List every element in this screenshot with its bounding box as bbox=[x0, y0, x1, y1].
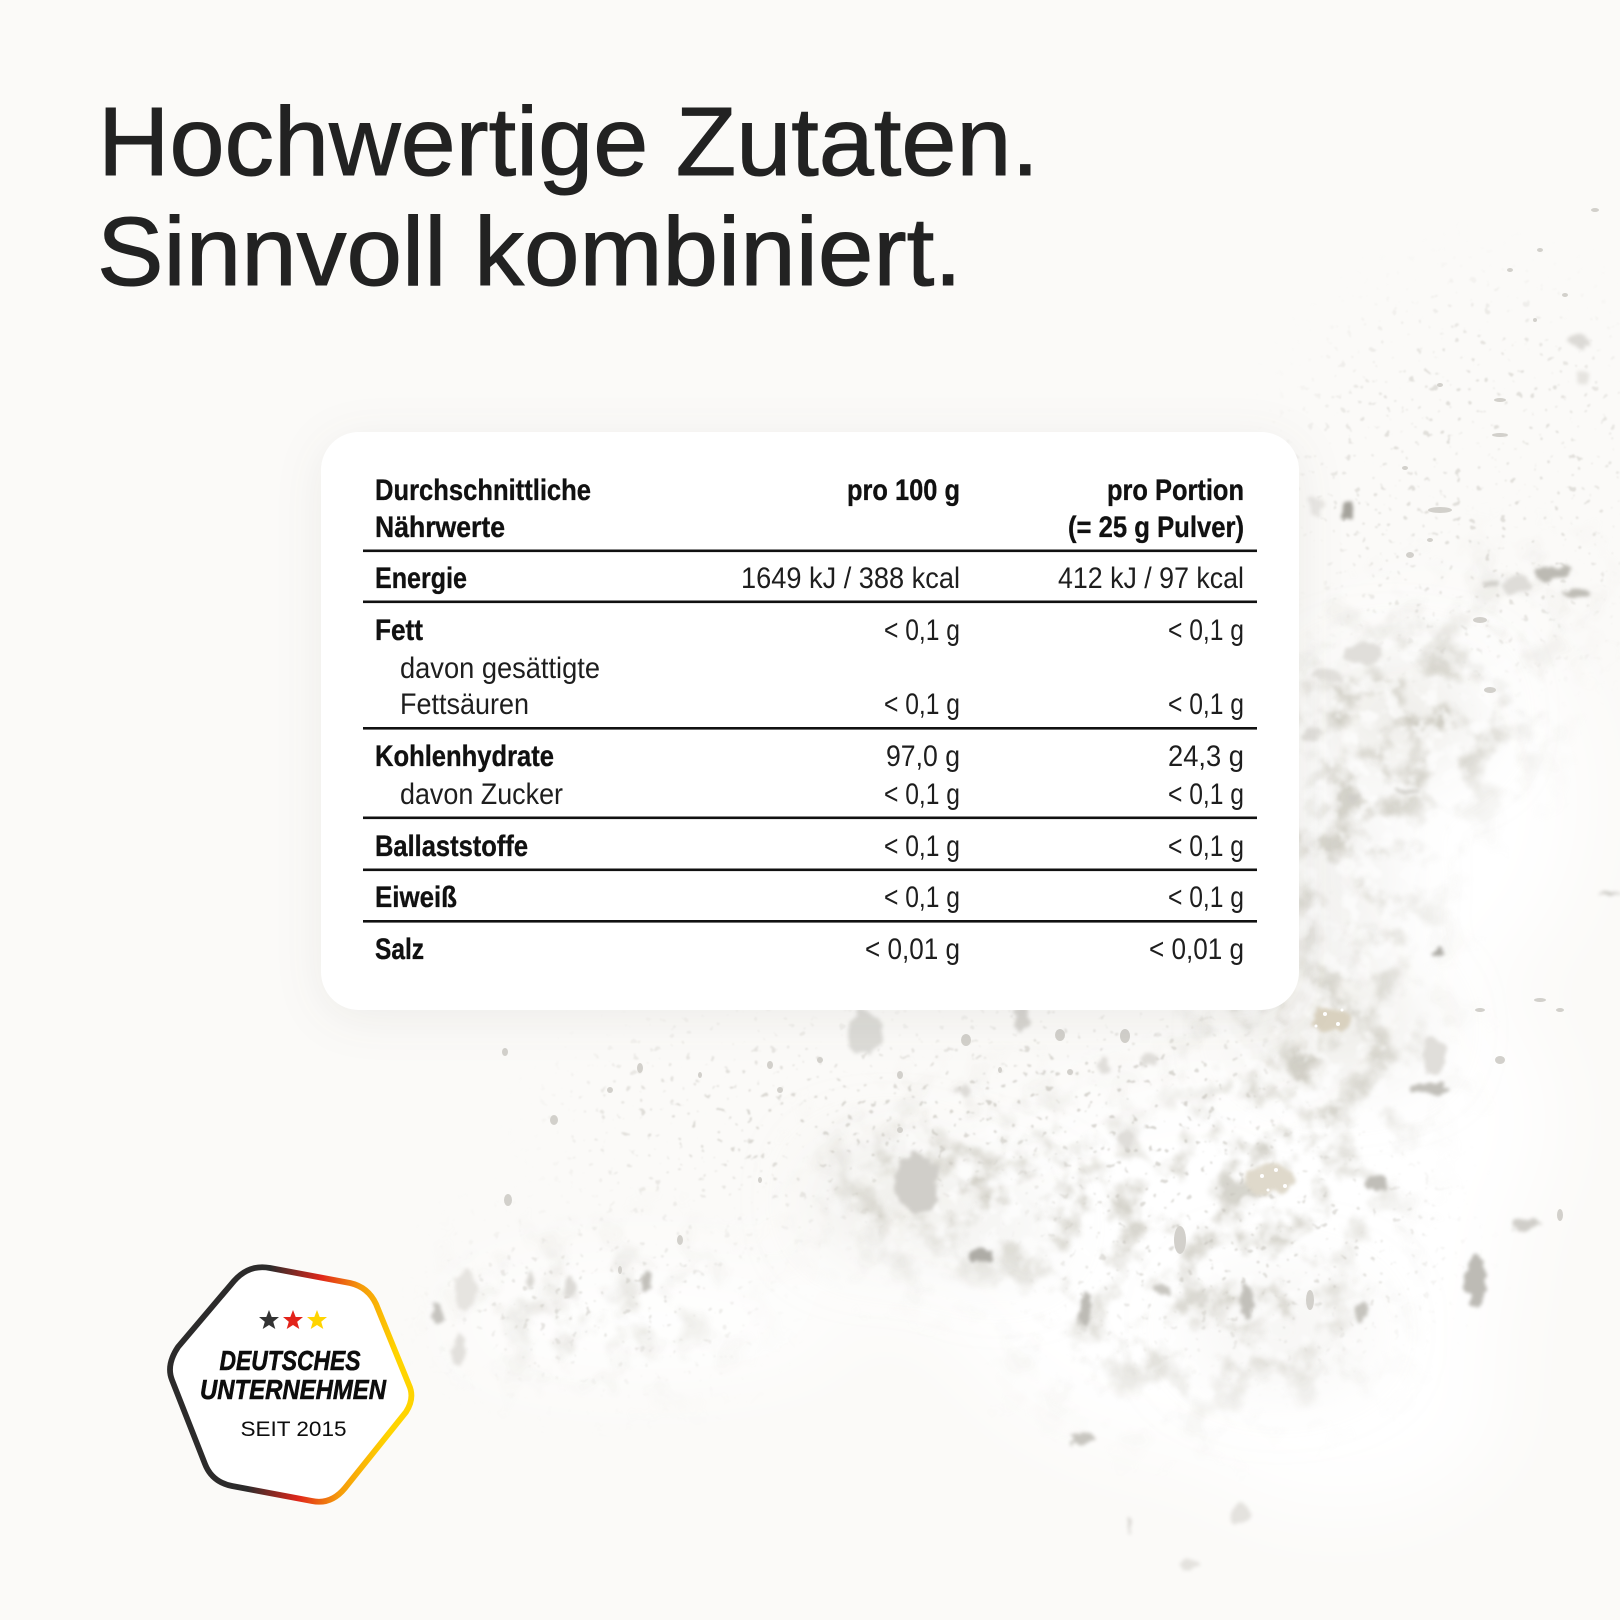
icon: three stars bbox=[259, 1310, 327, 1329]
column: pro 100 g values: < 0,1 g bbox=[884, 614, 960, 647]
row labels: Kohlenhydrate bbox=[375, 740, 554, 773]
table header: Durchschnittliche bbox=[375, 474, 591, 507]
table header: pro 100 g bbox=[847, 474, 960, 507]
table header: (= 25 g Pulver) bbox=[1068, 511, 1244, 544]
row labels: Fett bbox=[375, 614, 423, 647]
badge: Deutsches Unternehmen bbox=[170, 1267, 411, 1502]
brown flecks bbox=[1260, 1008, 1344, 1192]
column: pro 100 g values: 97,0 g bbox=[886, 740, 960, 773]
column: pro Portion values: < 0,1 g bbox=[1168, 688, 1244, 721]
powder splash image bbox=[400, 200, 1620, 1620]
table header bbox=[375, 474, 1244, 544]
sub-row labels: davon Zucker bbox=[400, 778, 563, 811]
column: pro 100 g values: < 0,01 g bbox=[865, 933, 960, 966]
panel: nutrition table card bbox=[321, 432, 1299, 1010]
row labels bbox=[375, 562, 554, 966]
title: Hochwertige Zutaten. bbox=[98, 87, 1039, 196]
column: pro Portion values: < 0,1 g bbox=[1168, 881, 1244, 914]
row labels: Energie bbox=[375, 562, 467, 595]
title: Sinnvoll kombiniert. bbox=[97, 197, 962, 306]
sub-row labels bbox=[400, 652, 600, 811]
sub-row labels: davon gesättigte bbox=[400, 652, 600, 685]
column: pro 100 g values: < 0,1 g bbox=[884, 688, 960, 721]
row labels: Ballaststoffe bbox=[375, 830, 528, 863]
chunks bbox=[431, 335, 1620, 1571]
table header: pro Portion bbox=[1107, 474, 1244, 507]
badge text: SEIT 2015 bbox=[240, 1417, 347, 1441]
table rules bbox=[363, 550, 1257, 923]
badge text: UNTERNEHMEN bbox=[200, 1374, 387, 1405]
column: pro 100 g values: < 0,1 g bbox=[884, 830, 960, 863]
row labels: Salz bbox=[375, 933, 424, 966]
column: pro Portion values: < 0,1 g bbox=[1168, 830, 1244, 863]
column: pro 100 g values: < 0,1 g bbox=[884, 881, 960, 914]
column: pro Portion values: < 0,1 g bbox=[1168, 778, 1244, 811]
column: pro Portion values bbox=[1058, 562, 1244, 966]
column: pro Portion values: 24,3 g bbox=[1168, 740, 1244, 773]
column: pro 100 g values: 1649 kJ / 388 kcal bbox=[741, 562, 960, 595]
column: pro 100 g values: < 0,1 g bbox=[884, 778, 960, 811]
column: pro Portion values: < 0,01 g bbox=[1149, 933, 1244, 966]
badge text: DEUTSCHES bbox=[220, 1345, 361, 1376]
badge text bbox=[200, 1345, 387, 1441]
column: pro Portion values: 412 kJ / 97 kcal bbox=[1058, 562, 1244, 595]
badge hexagon bbox=[170, 1267, 411, 1502]
column: pro 100 g values bbox=[741, 562, 960, 966]
column: pro Portion values: < 0,1 g bbox=[1168, 614, 1244, 647]
title bbox=[97, 87, 1039, 306]
row labels: Eiweiß bbox=[375, 881, 457, 914]
sub-row labels: Fettsäuren bbox=[400, 688, 529, 721]
table header: Nährwerte bbox=[375, 511, 505, 544]
